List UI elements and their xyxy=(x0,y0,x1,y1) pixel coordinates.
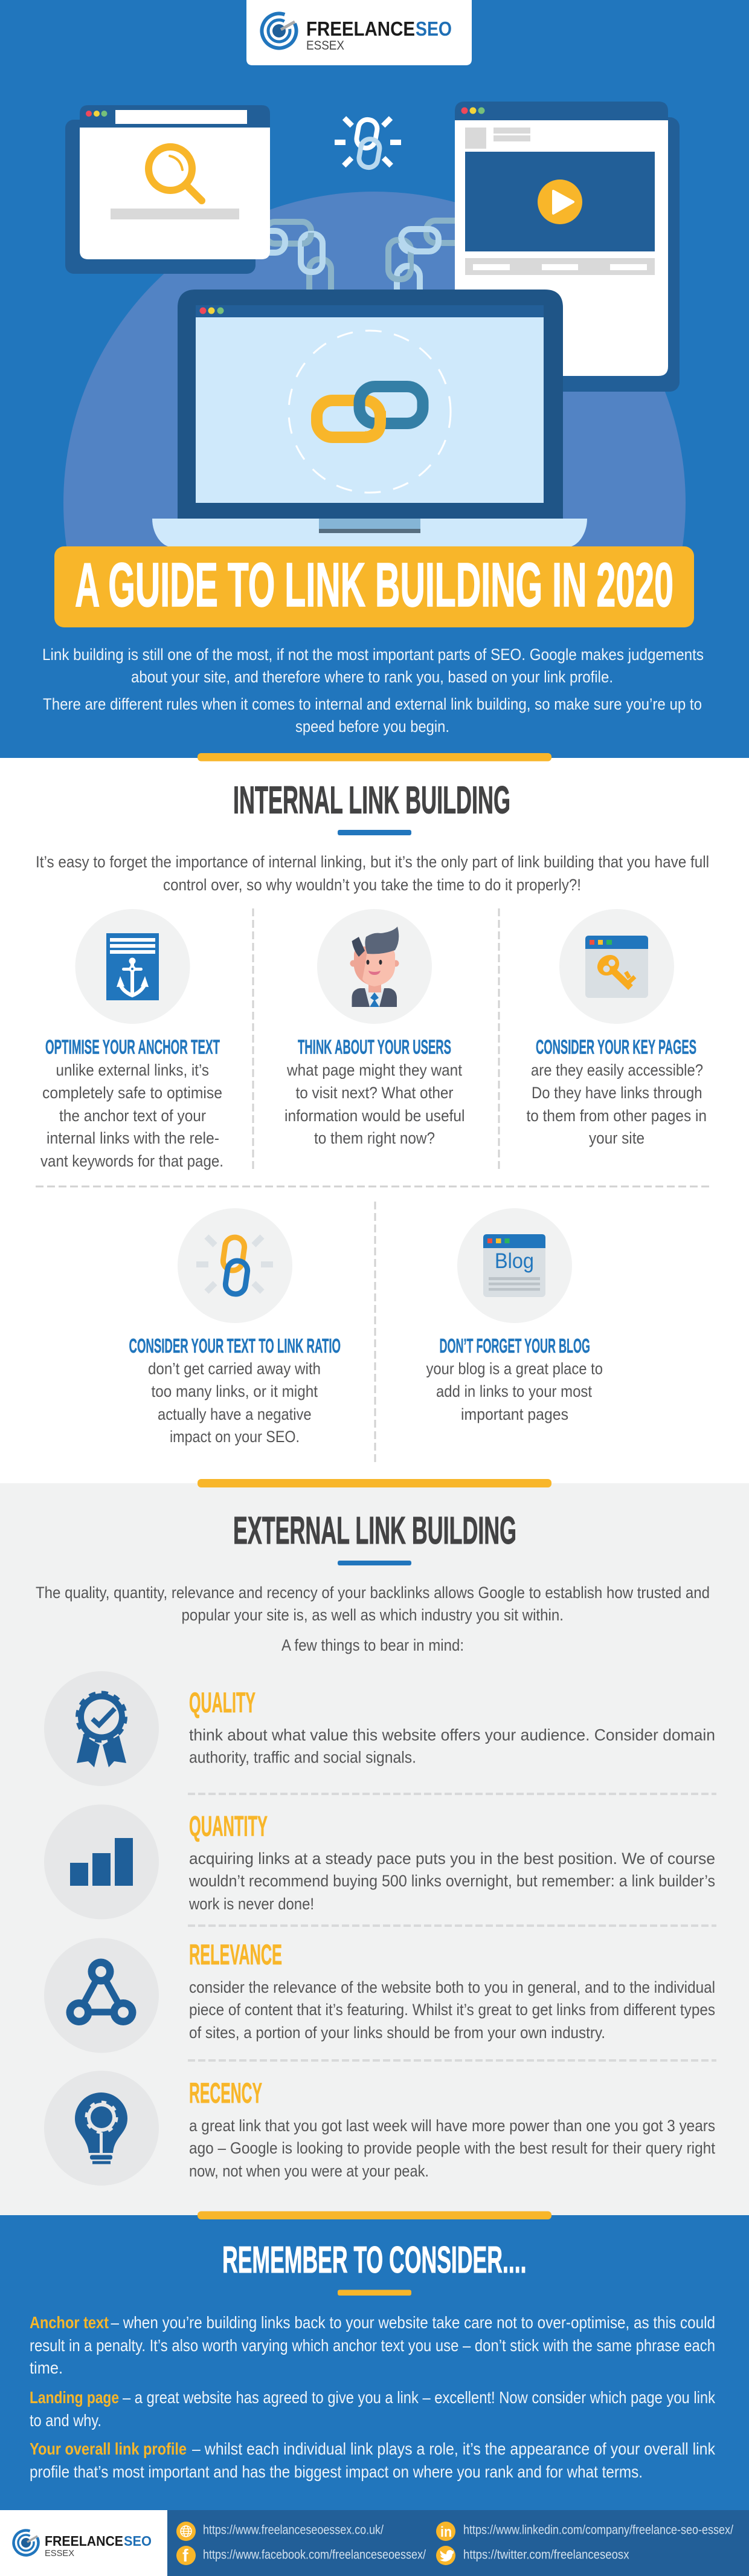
background circle xyxy=(63,192,686,546)
item: relevance: RELEVANCE xyxy=(189,1938,282,1970)
card: optimise your anchor text: internal links with the rele- xyxy=(47,1129,219,1147)
card: optimise your anchor text: completely safe to optimise xyxy=(42,1084,222,1102)
card: don't forget your blog: important pages xyxy=(461,1405,568,1423)
card: consider your key pages xyxy=(527,909,707,1147)
card: consider your text to link ratio xyxy=(129,1208,341,1446)
panel: external link building background xyxy=(0,1483,749,2215)
card: optimise your anchor text: OPTIMISE YOUR ANCHOR TEXT xyxy=(45,1036,220,1058)
icon: coloured chain link xyxy=(196,1234,273,1295)
divider pill xyxy=(198,1479,551,1487)
icon: blog window: Blog xyxy=(495,1249,534,1273)
heading: remember to consider: REMEMBER TO CONSIDER.... xyxy=(222,2239,527,2281)
text block: external intro: A few things to bear in mind: xyxy=(281,1636,464,1654)
icon: facebook: f xyxy=(182,2546,188,2566)
card: think about your users: to them right now? xyxy=(314,1129,435,1147)
card: consider your key pages: Do they have links through xyxy=(532,1084,702,1102)
heading: internal link building: INTERNAL LINK BUILDING xyxy=(233,778,510,822)
card: don't forget your blog xyxy=(426,1208,603,1423)
icon: light bulb xyxy=(75,2092,127,2164)
card: consider your key pages: your site xyxy=(589,1129,645,1147)
icon: linkedin xyxy=(436,2522,455,2541)
panel: laptop xyxy=(152,290,587,547)
text block: anchor text xyxy=(30,2313,715,2377)
card: optimise your anchor text: the anchor text of your xyxy=(59,1107,206,1125)
text block: anchor text: time. xyxy=(30,2358,63,2377)
text block: overall link profile: Your overall link profile xyxy=(30,2439,187,2458)
divider pill xyxy=(198,753,551,762)
icon: play button xyxy=(538,180,582,224)
item: recency: now, not when you were at your peak. xyxy=(189,2162,429,2180)
footer logo: SEO xyxy=(124,2533,152,2549)
icon: linkedin: in xyxy=(440,2524,452,2540)
panel: search browser window xyxy=(65,105,270,274)
footer link: twitter: https://twitter.com/freelanceseosx xyxy=(463,2548,629,2561)
icon: award ribbon xyxy=(77,1692,126,1767)
logo: Freelance SEO Essex xyxy=(246,0,472,65)
text block: external intro xyxy=(36,1584,710,1654)
logo: Freelance SEO Essex: FREELANCE xyxy=(306,18,415,40)
text block: internal intro xyxy=(36,853,709,894)
panel: remember to consider background xyxy=(0,2215,749,2510)
text block: internal intro: control over, so why wouldn’t you take the time to do it properly?! xyxy=(163,876,581,894)
heading: external link building xyxy=(233,1509,516,1565)
card: think about your users xyxy=(284,909,465,1147)
text block: landing page: to and why. xyxy=(30,2411,101,2430)
text block: overall link profile xyxy=(30,2439,716,2481)
panel: hero background xyxy=(0,0,749,758)
card: think about your users: what page might they want xyxy=(286,1061,462,1079)
item: quantity: acquiring links at a steady pace puts you in the best position. We of course xyxy=(189,1849,715,1868)
panel: video browser window xyxy=(455,102,680,392)
icon: bar chart xyxy=(70,1838,133,1886)
text block: landing page xyxy=(30,2388,716,2430)
footer logo: ESSEX xyxy=(45,2548,74,2558)
icon: top chain link xyxy=(335,116,401,169)
heading: internal link building xyxy=(233,778,510,835)
text block: anchor text: Anchor text xyxy=(30,2313,109,2332)
item: quantity: work is never done! xyxy=(188,1895,314,1913)
icon: network triangle xyxy=(66,1958,137,2025)
icon: facebook xyxy=(176,2546,196,2566)
item: relevance xyxy=(44,1938,715,2053)
text block: introduction: about your site, and therefore where to rank you, based on your link profile. xyxy=(131,668,613,686)
card: don't forget your blog: DON’T FORGET YOUR BLOG xyxy=(440,1335,590,1357)
item: relevance: of sites, a portion of your links should be from your own industry. xyxy=(189,2024,605,2042)
logo: Freelance SEO Essex: SEO xyxy=(416,18,452,40)
text block: overall link profile: profile that’s most important and has the biggest impact on where you rank and for what terms. xyxy=(30,2462,643,2481)
card: optimise your anchor text: unlike external links, it’s xyxy=(56,1061,209,1079)
card: consider your text to link ratio: don’t get carried away with xyxy=(148,1360,321,1378)
card: think about your users: information would be useful xyxy=(284,1107,465,1125)
item: quantity xyxy=(44,1805,715,1920)
card: think about your users: THINK ABOUT YOUR USERS xyxy=(298,1036,451,1058)
card: consider your key pages: to them from other pages in xyxy=(527,1107,707,1125)
text block: introduction: speed before you begin. xyxy=(295,717,449,736)
card: consider your key pages: are they easily accessible? xyxy=(531,1061,703,1079)
item: recency xyxy=(44,2071,715,2186)
icon: chains between windows xyxy=(260,221,475,314)
divider pill xyxy=(198,2211,551,2219)
heading: external link building: EXTERNAL LINK BUILDING xyxy=(233,1509,516,1552)
card: consider your text to link ratio: impact on your SEO. xyxy=(170,1428,300,1446)
icon: magnifying glass xyxy=(149,147,202,201)
icon: anchor document xyxy=(106,933,159,1000)
footer link: website: https://www.freelanceseoessex.co.uk/ xyxy=(203,2523,384,2537)
item: recency: RECENCY xyxy=(189,2077,262,2109)
item: quantity: wouldn’t recommend buying 500 links overnight, but remember: a link builder’s xyxy=(188,1872,715,1890)
footer logo: FREELANCE xyxy=(45,2533,123,2549)
item: quality: QUALITY xyxy=(189,1686,256,1718)
card: think about your users: to visit next? What other xyxy=(296,1084,453,1102)
card: optimise your anchor text xyxy=(40,909,223,1170)
card: consider your text to link ratio: actually have a negative xyxy=(158,1405,312,1423)
card: consider your text to link ratio: too many links, or it might xyxy=(151,1382,318,1400)
text block: external intro: popular your site is, as well as which industry you sit within. xyxy=(181,1606,564,1624)
item: quality xyxy=(44,1671,715,1786)
card: don't forget your blog: add in links to your most xyxy=(436,1382,592,1400)
footer logo xyxy=(10,2526,152,2559)
card: optimise your anchor text: vant keywords for that page. xyxy=(40,1152,223,1170)
text block: landing page: Landing page xyxy=(30,2388,119,2407)
card: consider your text to link ratio: CONSIDER YOUR TEXT TO LINK RATIO xyxy=(129,1335,341,1357)
heading: remember to consider xyxy=(222,2239,527,2296)
icon: twitter xyxy=(436,2546,455,2565)
icon: businessman xyxy=(350,927,399,1007)
icon: website xyxy=(176,2522,196,2541)
panel: internal link building background xyxy=(0,758,749,1483)
icon: key in browser window xyxy=(585,936,648,998)
card: don't forget your blog: your blog is a great place to xyxy=(426,1360,603,1378)
icon: blog window xyxy=(483,1234,545,1297)
item: quality: authority, traffic and social signals. xyxy=(189,1748,416,1766)
footer xyxy=(0,2510,749,2576)
logo: Freelance SEO Essex: ESSEX xyxy=(306,39,344,53)
item: quality: think about what value this website offers your audience. Consider domain xyxy=(189,1726,715,1744)
icon: interlocked links xyxy=(317,387,423,438)
text block: introduction xyxy=(42,646,704,736)
footer link: facebook: https://www.facebook.com/freelanceseoessex/ xyxy=(203,2548,426,2561)
item: quantity: QUANTITY xyxy=(189,1810,268,1842)
